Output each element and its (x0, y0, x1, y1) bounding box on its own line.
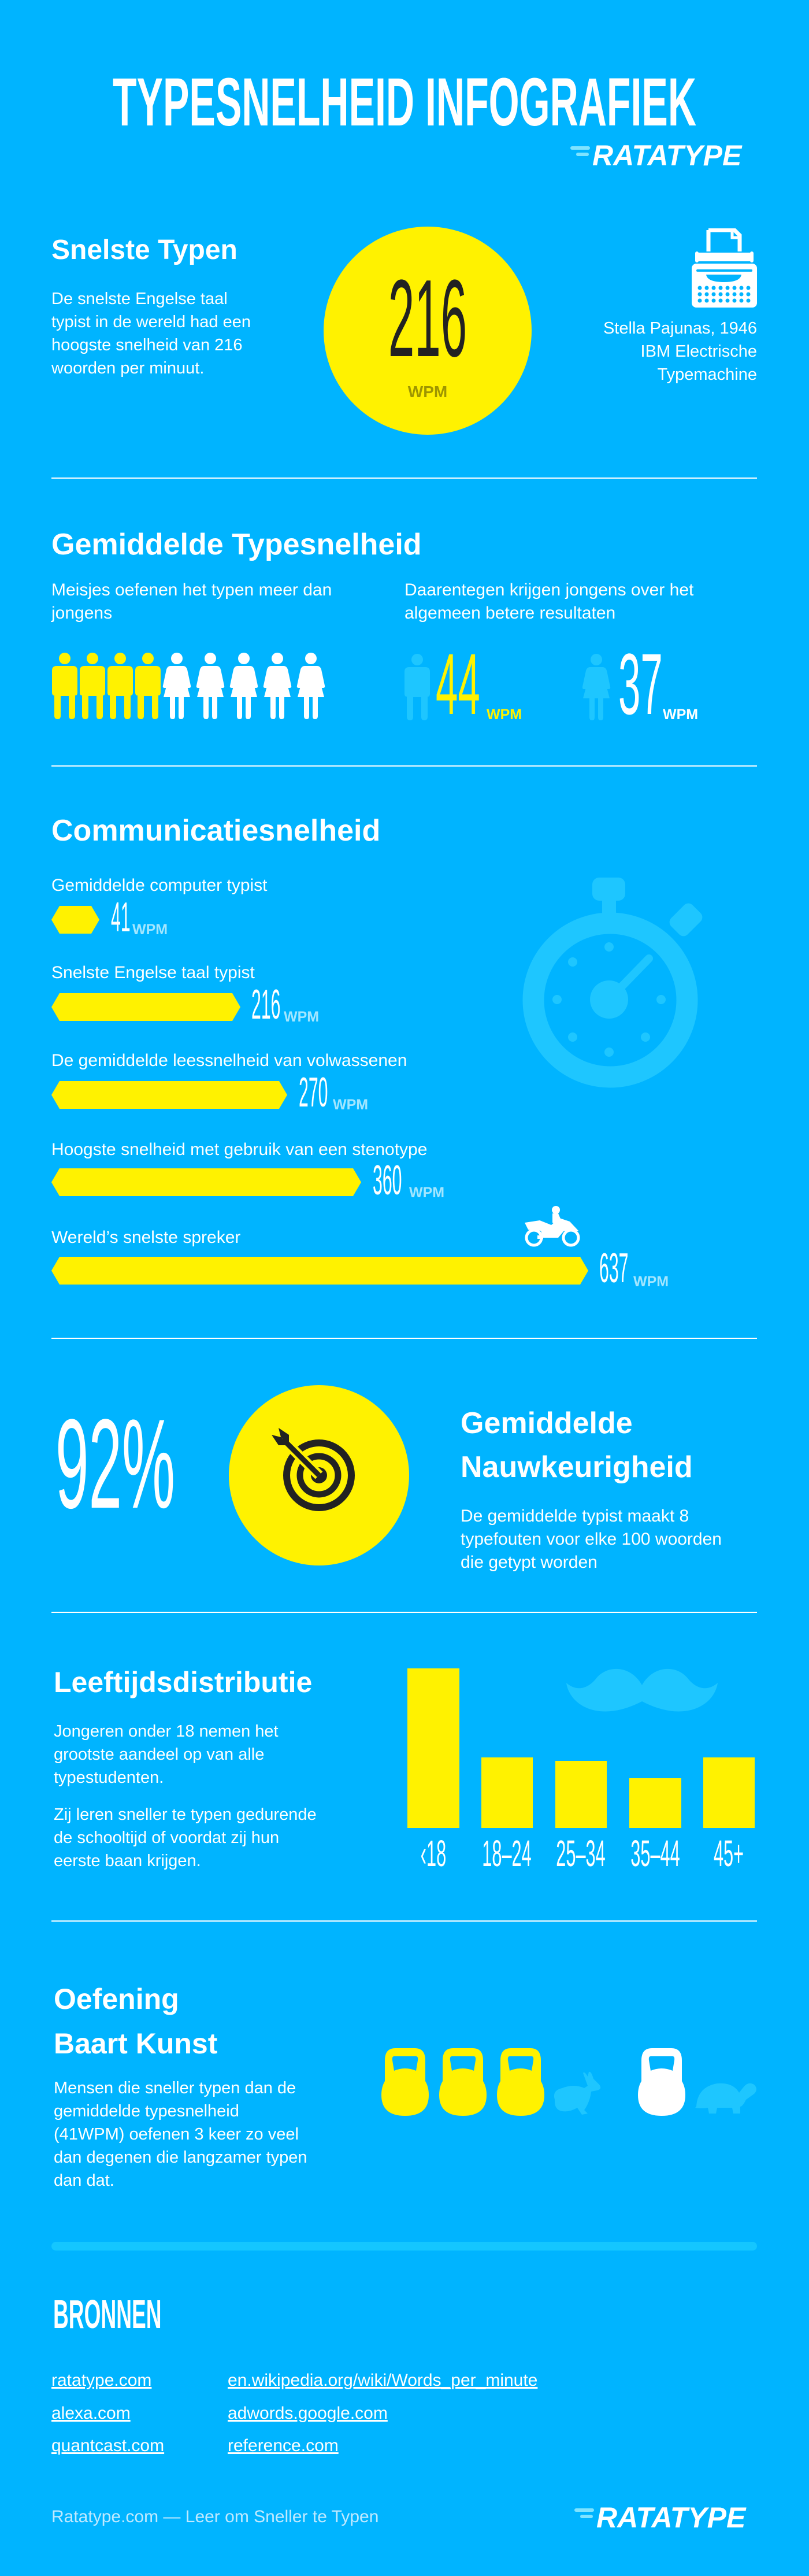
bar chart: age distribution: 25–34 (556, 1833, 606, 1874)
text: nauwkeurigheid: typefouten voor elke 100 woorden (461, 1530, 722, 1549)
stat: boys 44: 44 (436, 635, 480, 732)
text: nauwkeurigheid (461, 1507, 722, 1572)
row: stenotype: WPM (409, 1185, 444, 1201)
text: oefening: dan degenen die langzamer typen (54, 2148, 307, 2167)
label: Gemiddelde computer typist (51, 876, 268, 895)
bar chart: age distribution: 18–24 (482, 1833, 532, 1874)
sources list: en.wikipedia.org/wiki/Words_per_minute (228, 2371, 537, 2390)
text: meisjes: jongens (51, 604, 112, 623)
row: stenotype (51, 1140, 444, 1204)
bar chart: age distribution: ‹18 (421, 1833, 446, 1874)
text: jongeren: grootste aandeel op van alle (54, 1745, 264, 1764)
text: oefening: dan dat. (54, 2171, 114, 2190)
text: stella pajunas: IBM Electrische (641, 342, 757, 361)
icon: typewriter (692, 228, 757, 308)
icon: motorcycle (525, 1206, 580, 1246)
text: snelste typen: hoogste snelheid van 216 (51, 336, 243, 354)
heading: gemiddelde nauwkeurigheid: Gemiddelde (461, 1407, 633, 1440)
label: De gemiddelde leessnelheid van volwassenen (51, 1051, 407, 1070)
row: snelste spreker (51, 1228, 669, 1291)
heading: gemiddelde nauwkeurigheid: Nauwkeurigheid (461, 1450, 693, 1484)
stat: girls 37: 37 (618, 635, 663, 732)
heading: oefening baart kunst: Oefening (54, 1983, 179, 2015)
bar chart: age distribution: 45+ (714, 1833, 744, 1874)
bar chart: age distribution: 35–44 (630, 1833, 680, 1874)
title: TYPESNELHEID INFOGRAFIEK (113, 64, 696, 140)
text: nauwkeurigheid: die getypt worden (461, 1553, 598, 1572)
stat: 92%: 92% (55, 1393, 175, 1535)
logo: ratatype footer: RATATYPE (596, 2501, 745, 2534)
heading: communicatiesnelheid: Communicatiesnelheid (51, 814, 380, 847)
row: snelste engelse typist: WPM (284, 1009, 319, 1025)
sources list (51, 2371, 537, 2455)
wpm label: WPM (408, 383, 447, 401)
heading: gemiddelde typesnelheid: Gemiddelde Typesnelheid (51, 528, 422, 561)
text: oefening: (41WPM) oefenen 3 keer zo veel (54, 2125, 299, 2144)
text: oefening: gemiddelde typesnelheid (54, 2102, 239, 2120)
label: Hoogste snelheid met gebruik van een stenotype (51, 1140, 427, 1159)
row: snelste spreker: WPM (633, 1274, 669, 1290)
bar 41 (51, 906, 99, 934)
heading: gemiddelde nauwkeurigheid (461, 1407, 693, 1484)
text: stella pajunas: Stella Pajunas, 1946 (603, 319, 757, 338)
sources list: ratatype.com (51, 2371, 151, 2390)
heading: bronnen: BRONNEN (53, 2292, 162, 2337)
wpm yellow: WPM (487, 706, 522, 723)
label: Wereld’s snelste spreker (51, 1228, 240, 1247)
heading: oefening baart kunst: Baart Kunst (54, 2027, 217, 2060)
heading: leeftijdsdistributie: Leeftijdsdistributie (54, 1666, 312, 1698)
text: jongens: Daarentegen krijgen jongens over het (404, 580, 693, 599)
text: snelste typen: typist in de wereld had een (51, 313, 251, 331)
text: meisjes (51, 580, 332, 623)
text: oefening (54, 2079, 307, 2190)
wpm white: WPM (663, 706, 698, 723)
bar 637 (51, 1257, 588, 1285)
sources list: alexa.com (51, 2404, 131, 2423)
text: snelste typen: De snelste Engelse taal (51, 290, 228, 308)
text: stella pajunas (603, 319, 757, 384)
label: Snelste Engelse taal typist (51, 963, 255, 982)
row: leessnelheid (51, 1051, 407, 1116)
text: jongeren: typestudenten. (54, 1768, 164, 1787)
text: stella pajunas: Typemachine (658, 365, 757, 384)
bar 360 (51, 1168, 361, 1196)
icons: kettlebells, rabbit, turtle (381, 2048, 756, 2116)
icon: boy light (404, 654, 430, 720)
icon: mustache (566, 1669, 718, 1711)
text: snelste typen: woorden per minuut. (51, 359, 204, 377)
text: zij leren: de schooltijd of voordat zij hun (54, 1829, 279, 1847)
circle: 216 wpm (324, 227, 532, 435)
row: leessnelheid: WPM (333, 1097, 368, 1113)
text: jongeren: Jongeren onder 18 nemen het (54, 1722, 279, 1741)
text: oefening: Mensen die sneller typen dan de (54, 2079, 296, 2097)
text: jongeren (54, 1722, 279, 1787)
bar 216 (51, 993, 240, 1021)
number 216: 216 (388, 257, 467, 380)
sources list: reference.com (228, 2436, 339, 2455)
text: zij leren: Zij leren sneller te typen gedurende (54, 1805, 317, 1824)
logo: ratatype top: RATATYPE (592, 139, 741, 172)
value 41: 41 (111, 894, 131, 941)
text: zij leren (54, 1805, 317, 1870)
pictogram: 4 men 5 women (52, 653, 325, 719)
row: snelste engelse typist (51, 963, 319, 1028)
value 360: 360 (373, 1157, 402, 1204)
icon: target (272, 1428, 355, 1511)
heading: snelste typen: Snelste Typen (51, 235, 237, 265)
icon: stopwatch (522, 878, 703, 1088)
text: meisjes: Meisjes oefenen het typen meer dan (51, 580, 332, 599)
heading: oefening baart kunst (54, 1983, 217, 2060)
icon: girl light (582, 654, 610, 720)
text: nauwkeurigheid: De gemiddelde typist maakt 8 (461, 1507, 689, 1526)
footer text: Ratatype.com — Leer om Sneller te Typen (51, 2507, 378, 2526)
row: computer typist: WPM (132, 921, 168, 938)
bar chart: age distribution (407, 1668, 755, 1874)
text: zij leren: eerste baan krijgen. (54, 1852, 201, 1870)
sources list: adwords.google.com (228, 2404, 388, 2423)
value 270: 270 (299, 1069, 328, 1116)
circle: target (229, 1385, 409, 1565)
value 216: 216 (251, 982, 280, 1028)
text: jongens: algemeen betere resultaten (404, 604, 615, 623)
divider bar thick (51, 2242, 757, 2251)
value 637: 637 (599, 1245, 628, 1291)
text: jongens (404, 580, 693, 623)
bar 270 (51, 1081, 287, 1109)
row: computer typist (51, 876, 268, 941)
text: snelste typen (51, 290, 251, 377)
sources list: quantcast.com (51, 2436, 164, 2455)
